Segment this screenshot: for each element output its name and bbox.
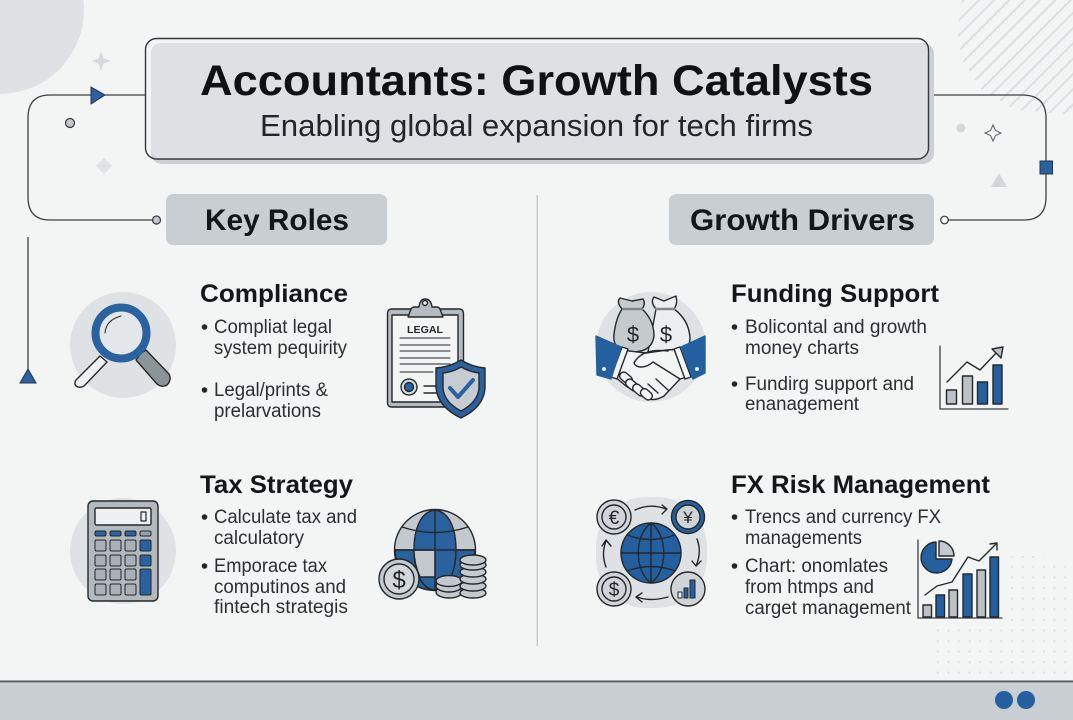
subtitle: Enabling global expansion for tech firms — [260, 108, 813, 143]
heading: key roles — [166, 194, 387, 245]
icon: calculator — [70, 498, 176, 604]
text: compliance: Legal/prints & — [214, 380, 328, 401]
left vertical arrow — [20, 237, 36, 383]
text: funding support: enanagement — [745, 394, 860, 415]
icon: legal clipboard and shield — [388, 299, 485, 418]
text: fx risk management — [731, 471, 991, 619]
text: tax strategy: Calculate tax and — [214, 507, 357, 528]
text: funding support: Fundirg support and — [745, 374, 914, 395]
icon: globe with coins: $ — [392, 567, 406, 594]
icon: handshake with money bags: $ — [627, 322, 639, 347]
text: funding support — [731, 280, 940, 415]
text: fx risk management: managements — [745, 528, 862, 549]
chart: growth bars — [940, 346, 1008, 409]
text: fx risk management: FX Risk Management — [731, 471, 991, 499]
text: tax strategy: Emporace tax — [214, 556, 327, 577]
text: tax strategy — [200, 471, 357, 618]
heading: growth drivers: Growth Drivers — [690, 204, 915, 237]
icon: handshake with money bags — [596, 292, 706, 402]
text: tax strategy: fintech strategis — [214, 597, 348, 618]
center divider — [536, 195, 538, 646]
right decorative marks — [956, 124, 1007, 187]
icon: legal clipboard and shield: LEGAL — [407, 324, 444, 336]
text: funding support: money charts — [745, 338, 859, 359]
text: fx risk management: Chart: onomlates — [745, 556, 888, 577]
text: fx risk management: carget management — [745, 598, 912, 619]
text: compliance: prelarvations — [214, 401, 321, 422]
icon: currency exchange: $ — [609, 580, 620, 601]
left connector — [28, 87, 160, 224]
right connector — [929, 95, 1052, 224]
chart: pie and bars — [918, 540, 1002, 618]
text: fx risk management: Trencs and currency FX — [745, 507, 941, 528]
text: funding support: Bolicontal and growth — [745, 317, 927, 338]
text: fx risk management: from htmps and — [745, 577, 874, 598]
icon: handshake with money bags: $ — [660, 322, 672, 347]
decorative stripes — [958, 0, 1073, 114]
text: tax strategy: calculatory — [214, 528, 304, 549]
text: tax strategy: computinos and — [214, 577, 346, 598]
icon: currency exchange: ¥ — [682, 508, 693, 527]
text: compliance: system pequirity — [214, 338, 347, 359]
icon: globe with coins — [379, 510, 486, 599]
heading: key roles: Key Roles — [205, 204, 349, 237]
left decorative marks — [66, 51, 112, 174]
text: funding support: Funding Support — [731, 280, 940, 308]
decorative corner circle — [0, 0, 84, 94]
text: compliance: Compliance — [200, 280, 348, 308]
icon: currency exchange: € — [609, 508, 620, 529]
title panel — [146, 38, 934, 164]
text: compliance — [200, 280, 348, 422]
decorative dot grid — [936, 556, 1066, 674]
text: tax strategy: Tax Strategy — [200, 471, 353, 499]
title: Accountants: Growth Catalysts — [200, 57, 873, 105]
icon: currency exchange — [596, 497, 707, 608]
text: compliance: Compliat legal — [214, 317, 332, 338]
heading: growth drivers — [669, 194, 934, 245]
footer bar — [0, 680, 1073, 720]
icon: magnifier — [70, 292, 176, 398]
